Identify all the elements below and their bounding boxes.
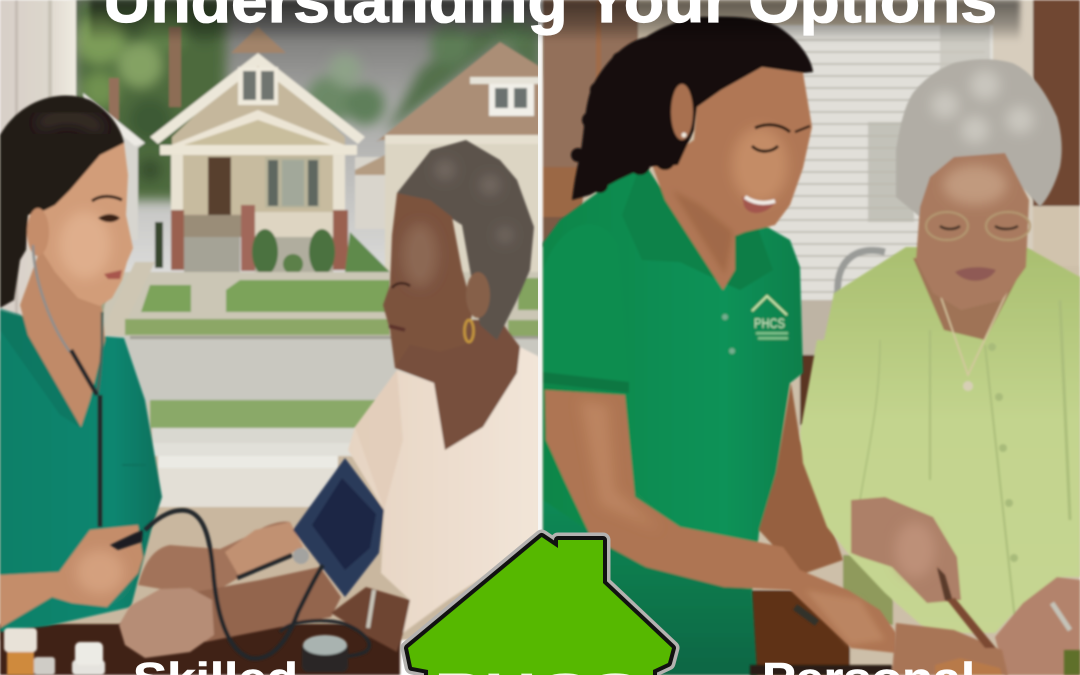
shrubs [252,229,278,275]
caregiver neck and face [653,67,812,290]
caregiver near arm and hand [545,390,896,653]
panel: personal care photo [543,0,1080,675]
nurse ear [27,208,49,256]
patient neck and chest [395,320,520,450]
necklace [935,280,1008,375]
patient mouth [389,326,405,330]
logo: PHCS green house [408,537,672,675]
valve [293,548,309,564]
cardigan placket lines [860,300,1070,620]
window sill [152,428,357,443]
elder mouth [955,267,996,281]
elder glasses [926,212,968,240]
sleeve [543,224,630,393]
lower right wrist and hand [995,577,1080,675]
pill bottles [4,628,105,675]
patient near arm [195,567,341,642]
pocket seam [122,464,146,466]
stethoscope [33,245,102,527]
patient [110,140,540,672]
neighbor house right [385,143,540,293]
patient blouse [348,347,540,633]
caregiver ear [671,84,693,140]
polo logo [752,296,788,340]
panel: skilled care photo [0,0,540,675]
bulb [110,530,143,550]
nurse scrubs [0,310,162,632]
caregiver brows eyes [755,125,790,132]
nurse hair [0,95,124,308]
collar [622,160,724,283]
patient far arm and hand [138,522,303,597]
nurse hand and forearm [0,525,143,628]
cardigan [800,247,1080,633]
caregiver hair [572,17,813,200]
caregiver [543,17,896,675]
table [0,624,400,675]
earring [464,320,474,342]
patient hair [397,140,534,340]
gauge [302,642,348,672]
nurse lips [104,270,122,279]
lower cabinet [750,590,850,675]
blood pressure cuff [293,458,384,597]
main house [172,55,345,215]
knife handle [795,607,817,623]
neighbor house left [83,93,145,240]
patient hand [119,588,214,658]
caregiver mouth [742,196,776,213]
divider [538,0,543,675]
cutting board and knife [750,567,1080,675]
nurse [0,95,162,632]
bracelet [368,590,374,628]
watch [1052,603,1070,630]
elder neck [913,258,1026,340]
kitchen background [543,0,1080,675]
nurse face [35,143,133,306]
elder hair [896,59,1062,217]
elder face [916,153,1029,310]
patient second hand and wrist [331,587,410,652]
tubing [145,510,369,658]
pavement and lawns [76,272,540,428]
caregiver far arm [759,383,843,575]
polo buttons [722,314,728,320]
nurse neck [20,250,105,427]
elder left hand [851,497,961,603]
nurse brow and eye [92,196,122,201]
window frame and wall [0,0,76,340]
caregiver polo body [543,160,803,675]
patient face [383,193,473,368]
wall below sill [150,507,390,632]
title shadow band [90,0,1020,42]
elderly woman [800,59,1080,675]
polo logo: PHCS [754,315,785,331]
window scene: house and street [0,0,540,640]
trees [76,0,540,200]
chimneys [169,27,181,107]
faucet [838,250,885,295]
